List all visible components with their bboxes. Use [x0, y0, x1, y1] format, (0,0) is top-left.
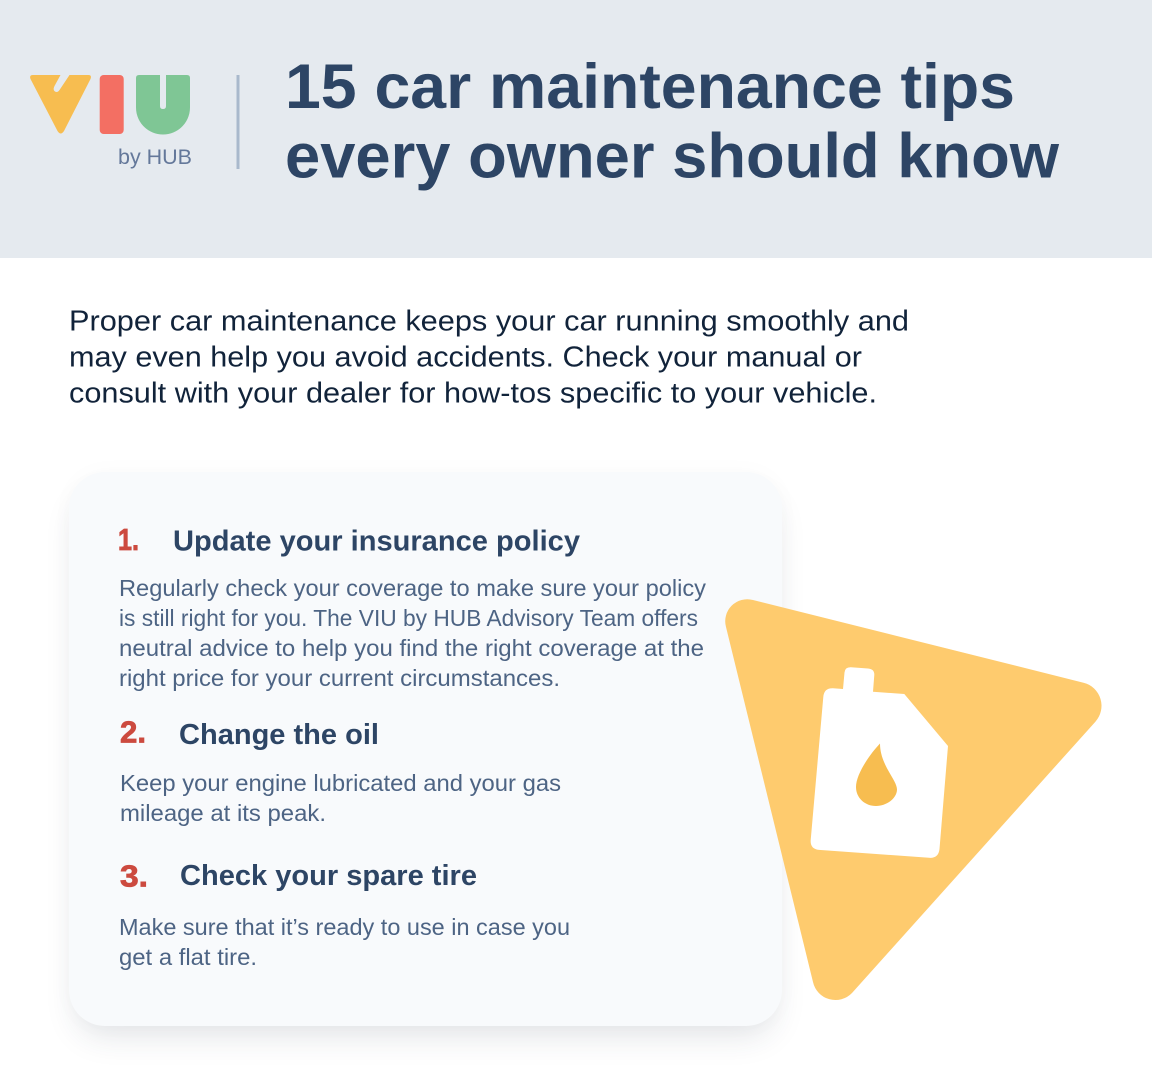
title: every owner should know	[285, 122, 1060, 192]
tip 1 number: 1.	[118, 522, 139, 557]
intro paragraph	[69, 306, 909, 410]
tip 1 heading: Update your insurance policy	[173, 526, 580, 558]
tip 2 body: mileage at its peak.	[120, 800, 326, 826]
tip 1 body: Regularly check your coverage to make sure your policy	[119, 575, 707, 601]
icon: oil bottle on yellow triangle	[725, 599, 1102, 1000]
tip 1 body: is still right for you. The VIU by HUB Advisory Team offers	[119, 605, 698, 631]
title	[285, 52, 1060, 192]
tip 1 body: neutral advice to help you find the right coverage at the	[119, 635, 704, 661]
tip 1 body: right price for your current circumstances.	[119, 665, 560, 691]
tip 2 heading: Change the oil	[179, 719, 379, 751]
oil bottle	[811, 667, 948, 858]
tip 2: change the oil	[120, 714, 561, 826]
yellow rounded triangle	[725, 599, 1102, 1000]
tip 2 body: Keep your engine lubricated and your gas	[120, 770, 561, 796]
tip 3 number: 3.	[120, 858, 148, 894]
intro paragraph: may even help you avoid accidents. Check your manual or	[69, 342, 863, 374]
tip 2 body	[120, 770, 561, 826]
tip 3 body: get a flat tire.	[119, 944, 257, 970]
logo: VIU by HUB	[30, 75, 192, 169]
oil drop	[856, 744, 897, 806]
tip 3: check your spare tire	[119, 858, 570, 970]
intro paragraph: consult with your dealer for how-tos specific to your vehicle.	[69, 378, 877, 410]
panel: tips card	[69, 472, 782, 1026]
tip 2 number: 2.	[120, 714, 146, 750]
header band	[0, 0, 1152, 258]
tip 3 body: Make sure that it’s ready to use in case you	[119, 914, 570, 940]
tip 1 body	[119, 575, 707, 691]
intro paragraph: Proper car maintenance keeps your car running smoothly and	[69, 306, 909, 338]
tip 3 body	[119, 914, 570, 970]
logo: VIU by HUB: by HUB	[118, 145, 192, 169]
tip 1: update your insurance policy	[118, 522, 707, 691]
title: 15 car maintenance tips	[285, 52, 1015, 122]
logo divider	[236, 75, 240, 169]
tip 3 heading: Check your spare tire	[180, 860, 477, 892]
